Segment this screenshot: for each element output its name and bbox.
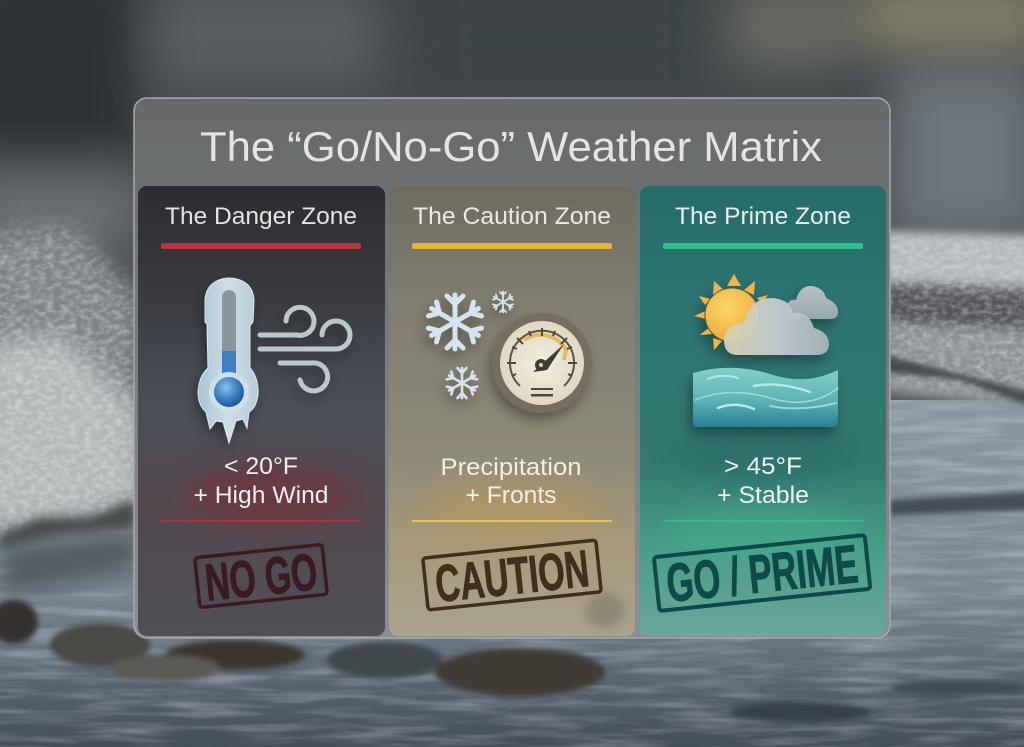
stamp: caution bbox=[423, 539, 602, 615]
condition text: danger: + High Wind bbox=[194, 482, 328, 509]
condition text: danger: < 20°F bbox=[224, 453, 298, 480]
heading: prime: The Prime Zone bbox=[675, 203, 851, 230]
dark water reflections bbox=[0, 492, 1024, 600]
icon: sun and clouds bbox=[694, 274, 838, 355]
panel: prime zone bbox=[640, 186, 886, 636]
stamp: caution: CAUTION bbox=[433, 540, 592, 614]
condition text: prime: > 45°F bbox=[724, 453, 802, 480]
icon: snowflakes bbox=[428, 292, 514, 398]
stamp: no go: NO GO bbox=[202, 543, 320, 613]
condition text: caution: Precipitation bbox=[440, 454, 582, 481]
glass panel bbox=[134, 98, 890, 638]
divider: prime bbox=[663, 520, 863, 522]
icon: calm water bbox=[693, 368, 838, 427]
divider: caution bbox=[412, 520, 612, 522]
right frosted bank bbox=[885, 228, 1024, 410]
panel: danger zone bbox=[138, 186, 385, 636]
left frosted bank bbox=[0, 215, 140, 550]
condition text: prime: + Stable bbox=[717, 482, 809, 509]
heading: caution: The Caution Zone bbox=[413, 203, 611, 230]
stamp: go / prime: GO / PRIME bbox=[664, 534, 861, 614]
icon: wind bbox=[260, 307, 350, 391]
accent bar: prime bbox=[663, 243, 863, 249]
rocks bbox=[0, 600, 1024, 722]
heading: danger: The Danger Zone bbox=[165, 203, 357, 230]
stamp: go / prime bbox=[654, 533, 871, 615]
icon: barometer gauge bbox=[492, 313, 592, 413]
accent bar: danger bbox=[161, 243, 361, 249]
stamp: no go bbox=[195, 542, 328, 614]
icon: frozen thermometer bbox=[198, 278, 258, 443]
panel: caution zone bbox=[389, 186, 635, 636]
accent bar: caution bbox=[412, 243, 612, 249]
divider: danger bbox=[161, 520, 361, 522]
condition text: caution: + Fronts bbox=[466, 482, 556, 509]
title: The “Go/No-Go” Weather Matrix bbox=[200, 123, 822, 170]
